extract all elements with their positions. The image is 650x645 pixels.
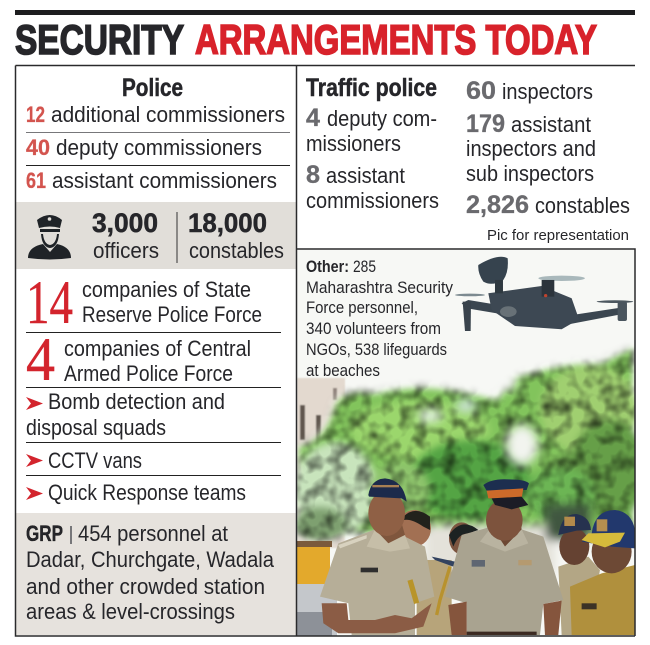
traffic: inspectors: inspectors	[502, 79, 593, 104]
icon: police officer	[28, 215, 71, 260]
photo text: other personnel: Force personnel,	[306, 298, 418, 317]
police row: deputy commissioners: deputy commissioners	[56, 135, 262, 160]
building	[297, 378, 345, 548]
stat: officers	[92, 208, 159, 263]
police row: additional commissioners: 12	[26, 102, 45, 127]
panel: traffic police	[306, 74, 630, 244]
traffic: constables: constables	[535, 193, 630, 218]
stat: 4 companies CAPF: companies of Central	[64, 336, 251, 361]
photo text: other personnel: 285	[353, 257, 376, 276]
bullet: bomb squads	[26, 389, 225, 440]
bullet: quick response teams: Quick Response teams	[48, 480, 246, 505]
traffic: assistant commissioners: 8	[306, 161, 320, 189]
stat: 4 companies CAPF	[26, 327, 251, 394]
bullet: bomb squads: disposal squads	[26, 415, 166, 440]
background man	[449, 522, 478, 554]
traffic: assistant commissioners: assistant	[326, 163, 405, 188]
traffic: assistant commissioners: commissioners	[306, 188, 439, 213]
police row: additional commissioners: additional commissioners	[51, 102, 285, 127]
traffic: assistant and sub inspectors: inspectors and	[466, 136, 596, 161]
text: GRP: Dadar, Churchgate, Wadala	[26, 547, 275, 572]
traffic: assistant and sub inspectors: sub inspectors	[466, 161, 594, 186]
officer right	[445, 479, 563, 635]
stat: 14 companies SRPF: 14	[26, 270, 73, 337]
top rule	[15, 10, 635, 15]
officer in yellow	[558, 510, 635, 635]
photo text: other personnel: Maharashtra Security	[306, 278, 453, 297]
text: GRP: areas & level-crossings	[26, 599, 235, 624]
text: GRP: 454 personnel at	[78, 521, 228, 546]
traffic: assistant and sub inspectors	[466, 110, 596, 186]
photo: police officers under trees	[292, 250, 650, 636]
bullet: CCTV vans: CCTV vans	[48, 448, 142, 473]
stat: constables: constables	[189, 238, 284, 263]
police row: deputy commissioners: 40	[26, 135, 50, 160]
grey band: GRP	[16, 513, 296, 635]
traffic: inspectors: 60	[466, 77, 496, 105]
traffic: deputy commissioners: missioners	[306, 131, 401, 156]
background man with glasses	[398, 510, 455, 635]
sky gaps and background	[418, 374, 590, 575]
photo text: other personnel	[306, 257, 453, 380]
photo text: other personnel: 340 volunteers from	[306, 319, 441, 338]
stat: 14 companies SRPF: companies of State	[82, 277, 251, 302]
bullet: CCTV vans	[26, 448, 142, 473]
barrier and road	[297, 541, 337, 636]
traffic: constables	[466, 191, 630, 219]
stat: 4 companies CAPF: Armed Police Force	[64, 361, 233, 386]
traffic: deputy commissioners: 4	[306, 104, 320, 132]
heading: traffic police: Traffic police	[306, 74, 437, 102]
officers	[320, 478, 635, 635]
text: GRP: GRP	[26, 521, 63, 546]
photo text: other personnel: at beaches	[306, 361, 380, 380]
traffic: assistant commissioners	[306, 161, 439, 213]
bullet: bomb squads: Bomb detection and	[48, 389, 225, 414]
photo credit: Pic for representation	[487, 227, 629, 244]
stat: officers: officers	[93, 238, 159, 263]
grey band: personnel totals	[16, 202, 296, 269]
stat: 14 companies SRPF: Reserve Police Force	[82, 302, 262, 327]
trees	[292, 345, 650, 543]
officer left	[320, 478, 434, 635]
police row: assistant commissioners: 61	[26, 168, 46, 193]
stat: 4 companies CAPF: 4	[26, 327, 55, 394]
stat: officers: 3,000	[92, 208, 158, 238]
traffic: deputy commissioners	[306, 104, 437, 156]
icon: drone	[455, 257, 633, 331]
title: SECURITY	[15, 16, 184, 63]
panel: police	[16, 74, 296, 635]
traffic: assistant and sub inspectors: assistant	[511, 112, 591, 137]
traffic: deputy commissioners: deputy com-	[327, 106, 437, 131]
text: GRP: and other crowded station	[26, 574, 265, 599]
traffic: constables: 2,826	[466, 191, 529, 219]
title	[15, 16, 597, 63]
traffic: inspectors	[466, 77, 593, 105]
photo text: other personnel: Other:	[306, 257, 349, 276]
stat: constables	[188, 208, 284, 263]
police row: assistant commissioners: assistant commissioners	[52, 168, 277, 193]
photo text: other personnel: NGOs, 538 lifeguards	[306, 340, 447, 359]
stat: 14 companies SRPF	[26, 270, 262, 337]
heading: police: Police	[122, 74, 183, 102]
text: GRP	[26, 521, 275, 624]
stat: constables: 18,000	[188, 208, 267, 238]
traffic: assistant and sub inspectors: 179	[466, 110, 505, 138]
